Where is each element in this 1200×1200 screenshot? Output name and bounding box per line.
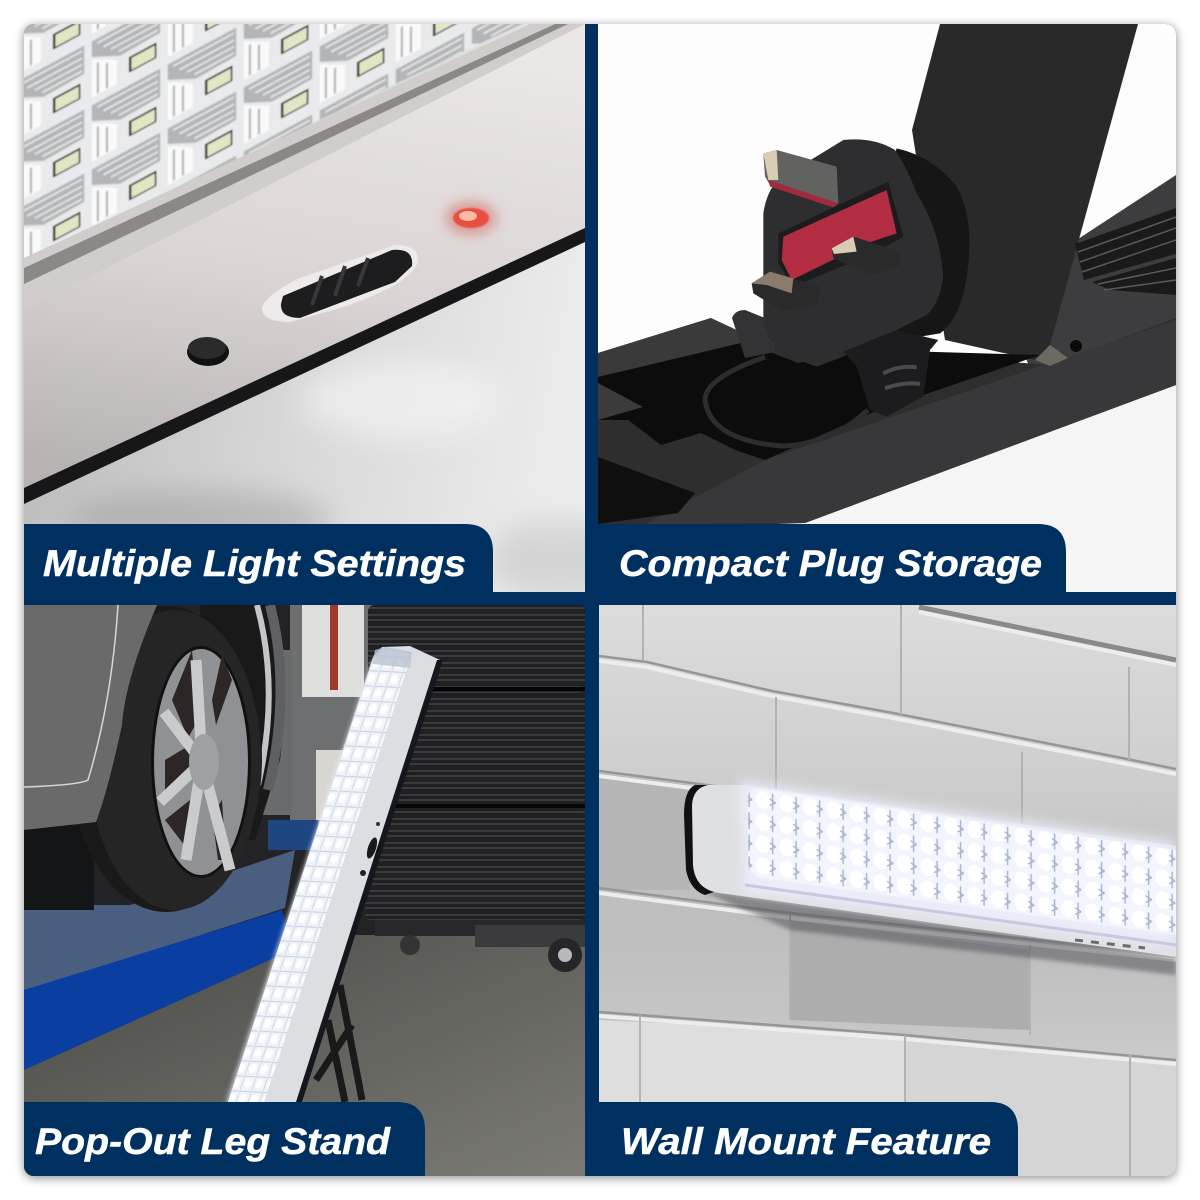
label: multiple light settings: Multiple Light Settings <box>43 543 466 584</box>
fuse recess <box>778 182 903 287</box>
fender lip <box>257 605 269 785</box>
small block <box>598 383 643 420</box>
cable grip <box>843 330 938 417</box>
door seam <box>24 605 118 787</box>
label: pop-out leg stand <box>24 1102 425 1176</box>
LED lens <box>748 788 1176 935</box>
photo: wall smudges <box>76 363 585 592</box>
black seam <box>24 228 585 504</box>
label: compact plug storage: Compact Plug Storage <box>619 543 1042 584</box>
coiled cable <box>705 357 868 446</box>
label: pop-out leg stand: Pop-Out Leg Stand <box>35 1121 391 1162</box>
plug back tab <box>732 310 775 358</box>
lamp shadow <box>700 890 1176 975</box>
icon: slide switch <box>262 245 418 322</box>
lamp glow <box>226 660 412 1102</box>
lower left recess <box>598 457 695 524</box>
lamp white body <box>228 646 440 1102</box>
tyre trolley <box>375 920 585 972</box>
switch marks <box>1075 940 1145 948</box>
lamp black mount <box>684 785 720 895</box>
LED glow <box>740 780 1176 945</box>
lens top corner <box>372 647 412 668</box>
car body <box>24 605 157 830</box>
neutral pin <box>832 236 884 264</box>
lamp base body <box>598 318 1176 530</box>
dark under car <box>24 825 94 910</box>
hinge pin <box>1070 340 1082 352</box>
fuse carrier <box>782 190 897 280</box>
label: compact plug storage <box>585 524 1066 592</box>
panel: compact plug storage <box>598 24 1176 592</box>
left lip <box>598 318 745 377</box>
brick wall <box>599 605 1176 1176</box>
live pin <box>752 276 804 300</box>
mortar shadows <box>599 605 1176 1176</box>
background workshop <box>290 605 374 826</box>
ramp top surface <box>24 850 295 990</box>
lamp base back section <box>1026 175 1176 365</box>
icon: red indicator LED <box>445 201 497 235</box>
lamp white body <box>692 785 1176 957</box>
label: wall mount feature: Wall Mount Feature <box>621 1121 991 1162</box>
switch and dots <box>360 822 380 876</box>
floor <box>24 935 585 1176</box>
lens frame <box>24 24 585 310</box>
LED lens grid <box>20 20 530 262</box>
storage recess <box>598 342 1040 460</box>
label: wall mount feature <box>585 1102 1018 1176</box>
vent slots <box>1075 208 1176 295</box>
icon: black button <box>187 337 229 366</box>
blue ramp front <box>24 910 292 1070</box>
earth pin <box>763 150 838 203</box>
panel: wall mount feature <box>599 605 1176 1176</box>
mortar highlights <box>599 612 1176 1064</box>
icon: UK plug <box>752 139 969 417</box>
front bar <box>645 320 1176 524</box>
leg stand <box>316 985 362 1102</box>
label: multiple light settings <box>24 524 493 592</box>
car tyre and alloy wheel <box>70 606 262 912</box>
panel: pop-out leg stand <box>24 605 585 1176</box>
black fold-out stand <box>912 24 1138 360</box>
stacked tyres <box>365 605 585 920</box>
LED strip <box>228 650 412 1102</box>
fender inner <box>200 605 283 840</box>
lamp body underside <box>24 24 585 494</box>
lower frame line <box>745 885 1176 945</box>
panel: multiple light settings <box>20 20 630 600</box>
